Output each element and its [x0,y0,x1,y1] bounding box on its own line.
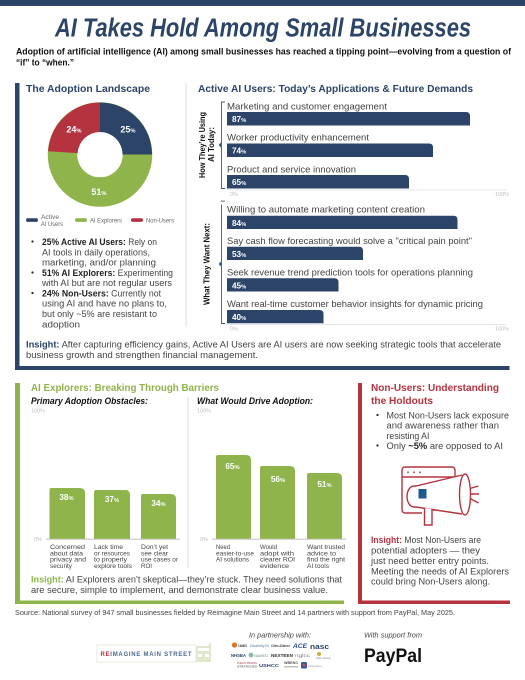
bullet list: non-users [376,410,509,451]
bar chart: what they want next: 45% [232,282,246,290]
bar chart: what they want next [227,204,509,332]
insight: active AI users: business growth and strengthen financial management. [26,350,258,360]
heading: active AI users: Active AI Users: Today’s Applications & Future Demands [198,83,473,95]
partner logos: NEXTEEN [271,653,293,658]
bar chart: how they're using AI today: Product and service innovation [227,164,356,174]
legend [26,214,174,228]
column chart: primary adoption obstacles: 37% [105,495,119,504]
logo: Reimagine Main Street: REIMAGINE MAIN STREET [100,652,192,658]
bullet list: adoption segments: with AI but are not regular users [41,278,173,288]
heading: non-users: the Holdouts [371,396,433,407]
bullet list: non-users: resisting AI [386,431,430,441]
column chart: primary adoption obstacles: ROI [141,563,152,570]
bullet list: adoption segments: 25% Active AI Users: Rely on [42,237,157,247]
bar chart: how they're using AI today [227,102,509,198]
panel: non-users [358,383,510,604]
column chart: what would drive adoption: 56% [271,475,285,484]
partner logos: NHSBA [231,653,247,658]
column chart: what would drive adoption: evidence [260,563,289,570]
bar chart: how they're using AI today: Marketing and customer engagement [227,102,387,112]
column chart: what would drive adoption: 65% [225,462,240,471]
column chart: what would drive adoption: easier-to-use [216,550,254,557]
insight: AI explorers: Insight: AI Explorers aren’t skeptical—they’re stuck. They need solutions that [31,574,342,584]
donut chart: adoption segments: 51% [91,187,107,197]
subtitle: “if” to “when.” [16,58,74,68]
subtitle [16,46,512,68]
insight: non-users: potential adopters — they [371,546,481,556]
column chart: primary adoption obstacles: Lack time [94,544,123,551]
bullet list: adoption segments [31,237,173,329]
insight: non-users: just need better entry points. [370,556,489,566]
column chart: what would drive adoption: find the right [307,557,345,564]
subheading: what would drive adoption: What Would Drive Adoption: [197,396,313,406]
bullet list: adoption segments: adoption [42,319,80,329]
partner logos: USHCC [259,663,280,669]
column chart: what would drive adoption: advice to [307,550,336,557]
partner logos: PUBLIC PRIVATE [237,661,257,665]
insight: non-users: could bring Non-Users along. [371,577,490,587]
partner logos: nasc [310,642,329,651]
column chart: what would drive adoption: Want trusted [307,544,345,551]
bullet list: non-users: Only ~5% are opposed to AI [386,441,503,451]
insight: AI explorers [31,574,342,595]
bracket label: how they're using AI today: How They’re Using [198,112,207,178]
bullet list: adoption segments: using AI and have no plans to, [42,299,167,309]
column chart: primary adoption obstacles: privacy and [50,557,86,564]
heading: AI explorers: AI Explorers: Breaking Through Barriers [31,383,219,394]
bar chart: how they're using AI today: 0% [230,192,238,198]
column chart: what would drive adoption: Need [216,544,230,551]
legend: Active [41,214,60,221]
partner logos: STRATEGIES [237,664,257,668]
bar chart: what they want next: 40% [232,313,246,322]
column chart: what would drive adoption: AI solutions [216,557,250,564]
partner logos: NAMEO [254,654,268,658]
insight: active AI users [26,340,501,360]
bullet list: adoption segments: but only ~5% are resistant to [42,309,157,319]
donut chart: adoption segments: 24% [66,124,82,134]
column chart: primary adoption obstacles: about data [50,550,83,557]
column chart: what would drive adoption: 0% [200,537,208,543]
insight: non-users [370,535,509,587]
bullet list: adoption segments: 51% AI Explorers: Experimenting [42,268,173,278]
bracket label: what they want next [202,201,225,324]
top bar [0,0,525,6]
bullet list: adoption segments: 24% Non-Users: Currently not [42,288,161,298]
column chart: primary adoption obstacles: 100% [31,408,45,414]
subheading: primary adoption obstacles: Primary Adoption Obstacles: [31,396,148,406]
bullet list: non-users: Most Non-Users lack exposure [386,410,509,420]
bullet list: non-users: and awareness rather than [386,420,499,430]
bracket label: how they're using AI today: AI Today: [207,127,216,162]
partner logos: Veterans [308,664,323,668]
column chart: what would drive adoption: adopt with [260,550,294,557]
bar chart: what they want next: Willing to automate marketing content creation [227,204,425,214]
bar chart: what they want next: 0% [230,326,238,332]
partner logos: nglcc [295,653,311,658]
column chart: primary adoption obstacles: Don’t yet [141,544,168,551]
column chart: primary adoption obstacles: 38% [59,493,74,502]
column chart: primary adoption obstacles: explore tools [94,563,133,570]
column chart: primary adoption obstacles: to properly [94,557,128,564]
bracket label: what they want next: What They Want Next: [202,223,212,305]
partner logos: Main Street [316,656,331,660]
bar chart: what they want next: Seek revenue trend prediction tools for operations planning [227,267,473,277]
partner logos [231,632,331,669]
donut chart: adoption segments [48,102,152,197]
insight: non-users: Meeting the needs of AI Explorers [371,566,509,576]
column chart: what would drive adoption: 100% [197,408,211,414]
legend: Non-Users [146,218,174,224]
partner logos: CAMEO [238,644,247,648]
partner logos: WBENC [284,661,298,665]
partner logos: Disability:IN [250,644,270,648]
column chart: primary adoption obstacles: see clear [141,550,169,557]
logo: PayPal: With support from [364,632,422,640]
column chart: what would drive adoption: 51% [317,480,332,489]
partner logos: ACE [292,644,308,650]
bar chart: how they're using AI today: Worker productivity enhancement [227,132,369,142]
bar chart: how they're using AI today: 65% [232,178,246,187]
partner logos: Cities Alliance [271,644,290,648]
legend: AI Users [41,221,63,228]
column chart: primary adoption obstacles: use cases or [141,557,179,564]
heading: non-users: Non-Users: Understanding [371,383,499,394]
bar chart: how they're using AI today: 87% [232,115,246,124]
bar chart: what they want next: Want real-time customer behavior insights for dynamic pricing [227,299,483,309]
legend: AI Explorers [90,218,122,224]
bullet list: adoption segments: AI tools in daily operations, [42,247,150,257]
panel: adoption landscape and active AI users [15,83,510,370]
column chart: primary adoption obstacles: 0% [34,537,42,543]
bar chart: what they want next: 53% [232,250,246,259]
bar chart: how they're using AI today: 74% [232,146,246,156]
bar chart: what they want next: 100% [495,326,509,332]
column chart: what would drive adoption: Would [260,544,277,551]
panel: AI explorers [15,383,346,604]
column chart: what would drive adoption: clearer ROI [260,557,295,564]
bar chart: what they want next: Say cash flow forecasting would solve a "critical pain point" [227,236,472,246]
heading: non-users [371,383,499,407]
source note: Source: National survey of 947 small businesses fielded by Reimagine Main Street and 14 partners with support from PayPal, May 2025. [15,608,455,617]
donut chart: adoption segments: 25% [120,124,136,134]
bar chart: how they're using AI today: 100% [495,192,509,198]
insight: non-users: Insight: Most Non-Users are [371,535,481,545]
heading: the adoption landscape: The Adoption Landscape [26,84,150,95]
partner logos: In partnership with: [249,632,311,640]
icon: megaphone in browser window [402,467,479,525]
bar chart: what they want next: 84% [232,219,246,228]
column chart: primary adoption obstacles: 34% [151,499,166,508]
column chart: what would drive adoption: AI tools [307,563,330,570]
insight: active AI users: Insight: After capturing efficiency gains, Active AI Users are AI users are now seeking strategic tools that accelerate [26,340,501,350]
column chart: primary adoption obstacles [31,408,180,570]
logo: PayPal: PayPal [364,645,422,667]
logo: Reimagine Main Street [97,642,211,662]
column chart: primary adoption obstacles: or resources [94,550,131,557]
column chart: primary adoption obstacles: security [50,563,73,570]
column chart: primary adoption obstacles: Concerned [50,544,85,551]
column chart: what would drive adoption [197,408,346,570]
insight: AI explorers: are secure, simple to implement, and demonstrate clear business value. [31,585,328,595]
bullet list: adoption segments: marketing, and/or planning [42,258,156,268]
bracket label: how they're using AI today [198,102,225,188]
subtitle: Adoption of artificial intelligence (AI) among small businesses has reached a tipping point—evolving from a question of [16,46,512,56]
logo: PayPal [364,632,422,667]
